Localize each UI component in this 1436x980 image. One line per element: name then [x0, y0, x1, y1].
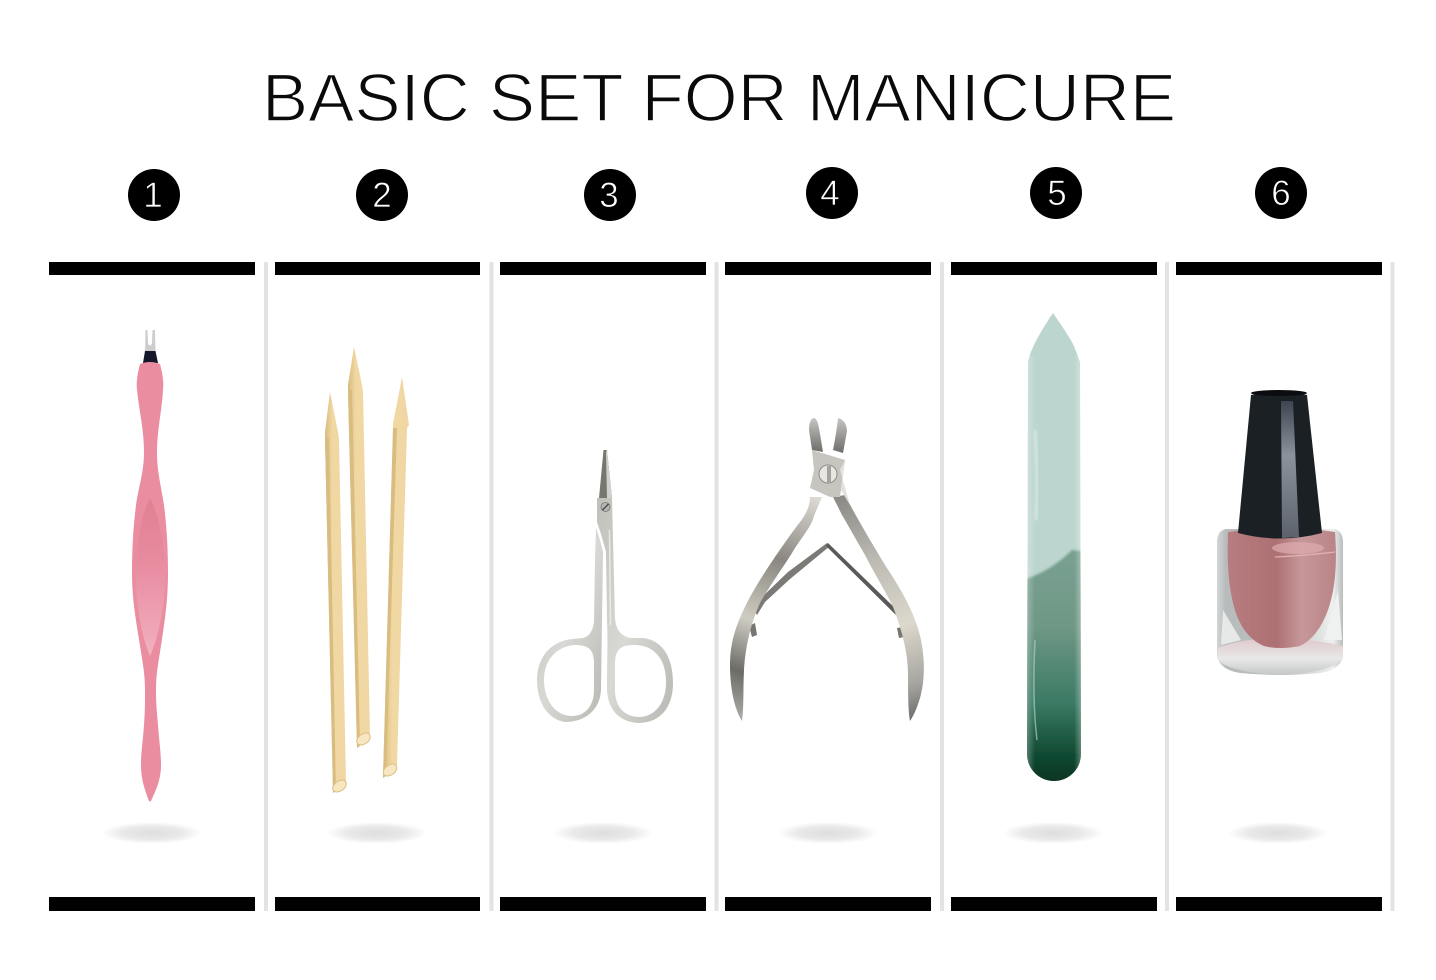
icon: nippers — [730, 418, 924, 721]
number badge 1: 1 — [143, 176, 163, 215]
number badge 3: 3 — [599, 176, 619, 215]
number badge 4 — [806, 167, 858, 219]
number badge 3 — [584, 169, 636, 221]
title: BASIC SET FOR MANICURE — [262, 60, 1176, 136]
panel 1: cuticle pusher — [49, 262, 255, 911]
panel 2: orange wood sticks — [275, 262, 480, 911]
icon: cuticle pusher — [132, 330, 168, 802]
panel 5: glass nail file — [951, 262, 1157, 911]
number badge 5 — [1030, 167, 1082, 219]
icon: glass nail file — [1027, 313, 1081, 781]
icon: wood stick middle — [348, 347, 373, 748]
number badge 1 — [128, 169, 180, 221]
number badge 5: 5 — [1047, 174, 1067, 213]
icon: nail polish bottle — [1217, 390, 1343, 675]
icon: wood stick right — [381, 377, 409, 778]
number badge 2: 2 — [372, 176, 392, 215]
number badge 4: 4 — [820, 174, 840, 213]
icon: scissors — [537, 450, 673, 723]
panel 6: nail polish — [1176, 262, 1382, 911]
number badge 2 — [356, 169, 408, 221]
number badge 6 — [1255, 167, 1307, 219]
panel 4: cuticle nippers — [725, 262, 931, 911]
icon: wood stick left — [325, 392, 349, 794]
number badge 6: 6 — [1271, 174, 1291, 213]
panel 3: cuticle scissors — [500, 262, 706, 911]
